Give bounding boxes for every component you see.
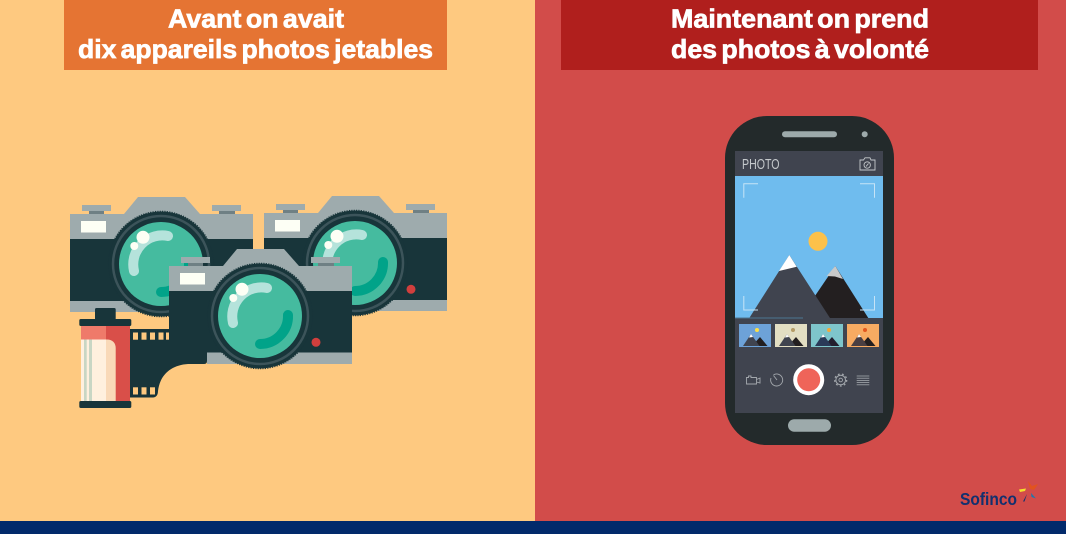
icon: timer: [771, 374, 783, 386]
heading: right: [561, 0, 1038, 70]
viewfinder scene: [735, 176, 883, 318]
icon: settings: [835, 374, 847, 386]
heading: left: [64, 0, 447, 70]
icon: small camera: [860, 158, 875, 170]
icon: camera back right: [264, 196, 447, 316]
icon: film strip: [130, 329, 188, 398]
filter thumbnail 1: [739, 324, 771, 347]
filter thumbnail 3: [811, 324, 843, 347]
logo: Sofinco: [960, 481, 1038, 509]
icon: camera front: [169, 249, 352, 369]
icon: video: [746, 376, 760, 384]
speaker: [782, 131, 837, 137]
record button: [793, 364, 824, 395]
icon: camera back left: [70, 197, 253, 317]
filter thumbnail 4: [847, 324, 879, 347]
icon: menu lines: [857, 376, 869, 385]
app title: PHOTO: [742, 156, 780, 173]
panel: right background: [535, 0, 1066, 521]
heading: left: Avant on avait: [168, 4, 344, 34]
panel: left background: [0, 0, 535, 521]
phone body: [725, 116, 894, 445]
footer bar: [0, 521, 1066, 534]
phone: [725, 116, 894, 445]
filter thumbnail 2: [775, 324, 807, 347]
heading: left: dix appareils photos jetables: [78, 34, 433, 64]
screen: [735, 151, 883, 413]
home button: [788, 419, 831, 432]
icon: film canister: [79, 308, 131, 408]
heading: right: Maintenant on prend: [671, 4, 929, 34]
front camera: [862, 131, 868, 137]
heading: right: des photos à volonté: [671, 34, 929, 64]
logo: Sofinco: Sofinco: [960, 489, 1017, 509]
viewfinder corners: [744, 184, 874, 310]
